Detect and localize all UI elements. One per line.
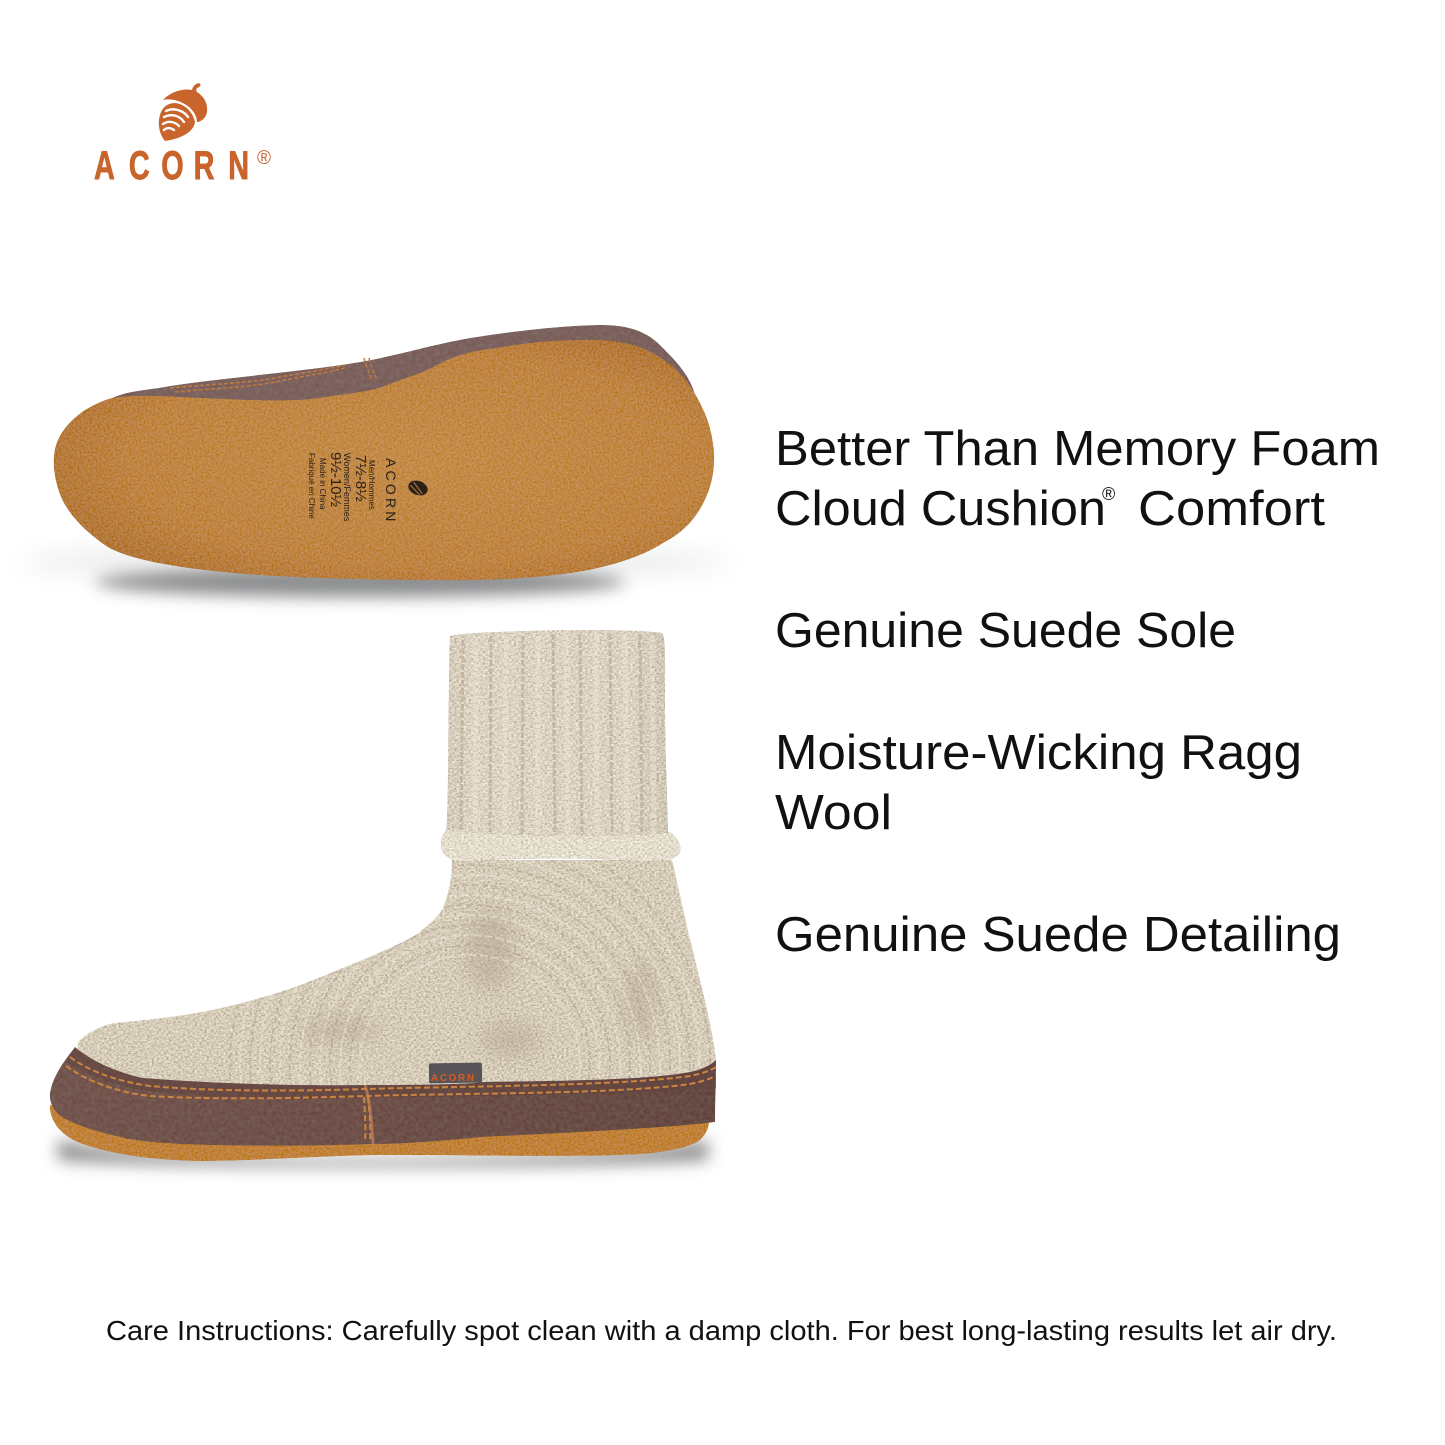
feature: cloud cushion comfort: Comfort (1138, 482, 1325, 536)
printed brand: ACORN (383, 458, 399, 525)
cuff fold (441, 830, 681, 862)
upper stitching (170, 358, 377, 392)
feature: suede sole: Genuine Suede Sole (775, 604, 1236, 658)
printed women size label: Women/Femmes (342, 453, 352, 522)
woven label (429, 1063, 482, 1084)
logo: Acorn (94, 83, 271, 188)
icon: acorn (159, 83, 207, 141)
feature: ragg wool: Moisture-Wicking Ragg (775, 726, 1302, 780)
printed origin: Made in China (318, 458, 327, 510)
wordmark: ACORN (94, 143, 249, 188)
slipper side view (50, 630, 730, 1305)
slipper sole view (20, 325, 730, 597)
feature: cloud cushion comfort: ® (1102, 484, 1115, 504)
feature: suede detailing: Genuine Suede Detailing (775, 908, 1341, 962)
printed origin french: Fabriqué en Chine (307, 453, 316, 519)
label text: ACORN (431, 1073, 476, 1084)
heel mottling (300, 910, 654, 1056)
sole shadow (20, 546, 730, 597)
feature: cloud cushion comfort: Cloud Cushion (775, 482, 1106, 536)
band dark top strip (66, 1047, 716, 1099)
registered mark: ® (257, 148, 271, 169)
sole (54, 340, 714, 580)
heel knit arcs (239, 860, 701, 1086)
printed women size: 9½-10½ (327, 452, 344, 508)
slipper shadow (58, 1140, 708, 1167)
cuff ribs (461, 634, 642, 835)
knit cuff (446, 630, 668, 838)
suede upper (112, 325, 695, 420)
suede band (50, 1047, 716, 1146)
band stitching (66, 1057, 716, 1142)
printed men size: 7½-8½ (352, 455, 369, 502)
printed acorn (406, 478, 430, 498)
care instructions: Care Instructions: Carefully spot clean with a damp cloth. For best long-lasting results let air dry. (106, 1315, 1337, 1346)
feature list (775, 422, 1380, 962)
sole printed marking (307, 452, 430, 525)
feature: ragg wool: Wool (775, 786, 892, 840)
feature: cloud cushion comfort (775, 422, 1380, 536)
feature: ragg wool (775, 726, 1302, 840)
feature: cloud cushion comfort: Better Than Memory Foam (775, 422, 1380, 476)
band seam (365, 1085, 373, 1144)
printed men size label: Men/Hommes (367, 460, 376, 510)
knit foot (78, 860, 716, 1090)
label tag (429, 1063, 482, 1083)
suede outsole edge (50, 1105, 709, 1161)
